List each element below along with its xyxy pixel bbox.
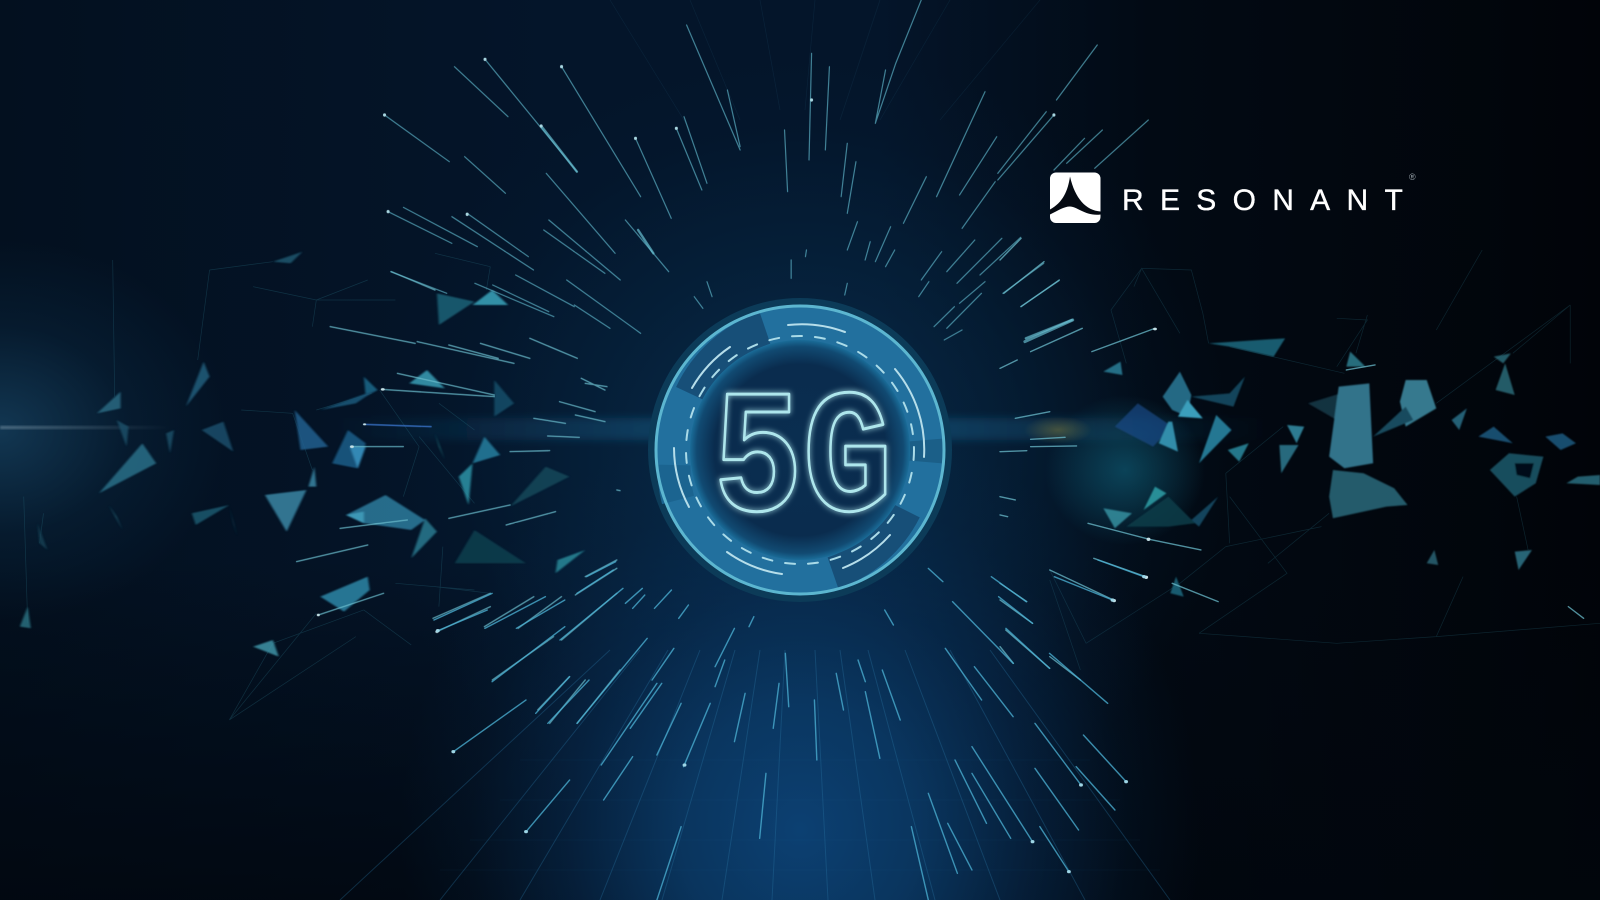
light rays: right	[1000, 238, 1584, 680]
logo mark	[1050, 172, 1100, 223]
light rays: top	[383, 0, 1148, 340]
mesh wires right	[1050, 250, 1600, 670]
mesh shards left	[20, 252, 585, 657]
ray head dots right	[1112, 328, 1157, 602]
inner disc	[690, 340, 910, 560]
outer halo	[648, 298, 952, 602]
light rays: bottom	[434, 560, 1146, 900]
long arc dashes	[674, 324, 924, 574]
mesh wires left	[24, 253, 490, 720]
bright outer rim	[656, 306, 944, 594]
dark arc segments	[674, 328, 926, 573]
ray head dots bottom	[436, 575, 1146, 873]
mesh shards right	[1103, 338, 1600, 597]
ray head dots top	[383, 58, 1055, 216]
left polygon mesh	[20, 252, 585, 720]
background glows	[0, 395, 1270, 545]
ray head dots left	[317, 388, 438, 633]
logo: Resonant	[1050, 172, 1419, 223]
5G ring emblem	[648, 298, 952, 602]
dashed inner circle	[686, 336, 914, 564]
registered mark: ®	[1409, 172, 1416, 182]
5G lettering: 5G	[713, 365, 893, 564]
perspective grid lines	[340, 0, 1170, 900]
wordmark: RESONANT	[1122, 184, 1419, 217]
light rays: left	[297, 272, 620, 723]
right polygon mesh	[1050, 250, 1600, 670]
ring band	[655, 305, 945, 595]
